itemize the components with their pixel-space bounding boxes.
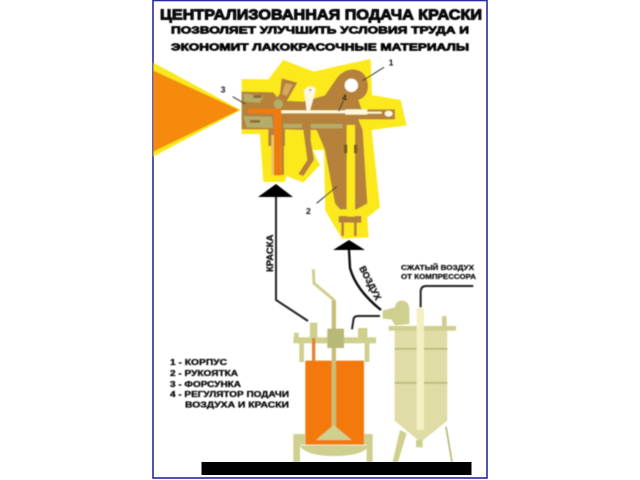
tank bottom (299, 445, 369, 456)
label 2: 2 (306, 206, 311, 216)
gun body (242, 69, 395, 209)
compressor receiver (383, 301, 456, 462)
stirrer handle (313, 269, 334, 300)
nozzle texture (243, 93, 343, 128)
subtitle line 2: ЭКОНОМИТ ЛАКОКРАСОЧНЫЕ МАТЕРИАЛЫ (171, 42, 469, 54)
label 2 (306, 187, 337, 216)
paint tank (293, 269, 376, 462)
ring opening (345, 79, 358, 92)
air pipes (352, 286, 473, 329)
legend: 1 - КОРПУС (170, 357, 227, 367)
legend: ВОЗДУХА И КРАСКИ (185, 400, 289, 410)
label 1 (363, 58, 394, 81)
label 1: 1 (389, 58, 394, 68)
compressed air caption: ОТ КОМПРЕССОРА (401, 272, 477, 281)
arrow: paint line (258, 184, 308, 321)
label 3: 3 (221, 85, 226, 95)
legend (170, 357, 289, 410)
yellow gun halo (242, 59, 407, 239)
label: air: ВОЗДУХ (357, 264, 383, 302)
tank lid (293, 337, 376, 343)
title: ЦЕНТРАЛИЗОВАННАЯ ПОДАЧА КРАСКИ (160, 6, 482, 24)
spray gun diagram (153, 58, 407, 239)
subtitle line 1: ПОЗВОЛЯЕТ УЛУЧШИТЬ УСЛОВИЯ ТРУДА И (171, 26, 469, 36)
legend: 4 - РЕГУЛЯТОР ПОДАЧИ (170, 389, 289, 399)
paint channel (248, 109, 281, 175)
valves (310, 323, 317, 338)
legend: 2 - РУКОЯТКА (170, 368, 238, 378)
label 4 (339, 92, 347, 111)
compressed air caption (401, 263, 477, 281)
paint spray cone (153, 63, 241, 157)
arrow: air line (333, 240, 381, 310)
air bore in handle (347, 125, 355, 217)
paint neck walls (268, 129, 285, 175)
label 3 (221, 85, 245, 104)
regulator (383, 301, 409, 325)
label: paint: КРАСКА (265, 234, 276, 272)
legs (393, 430, 407, 462)
handle grip bottom (339, 216, 361, 236)
needle (280, 109, 393, 117)
floor (202, 462, 472, 475)
label 4: 4 (342, 92, 347, 102)
compressed air caption: СЖАТЫЙ ВОЗДУХ (401, 263, 474, 272)
poster frame (153, 0, 487, 478)
title block (160, 6, 482, 54)
paint fill (305, 361, 364, 445)
legend: 3 - ФОРСУНКА (170, 379, 241, 389)
trigger pivot (304, 86, 316, 111)
equipment (293, 269, 473, 462)
paint cup fitting (273, 78, 297, 110)
stirrer (332, 300, 336, 440)
